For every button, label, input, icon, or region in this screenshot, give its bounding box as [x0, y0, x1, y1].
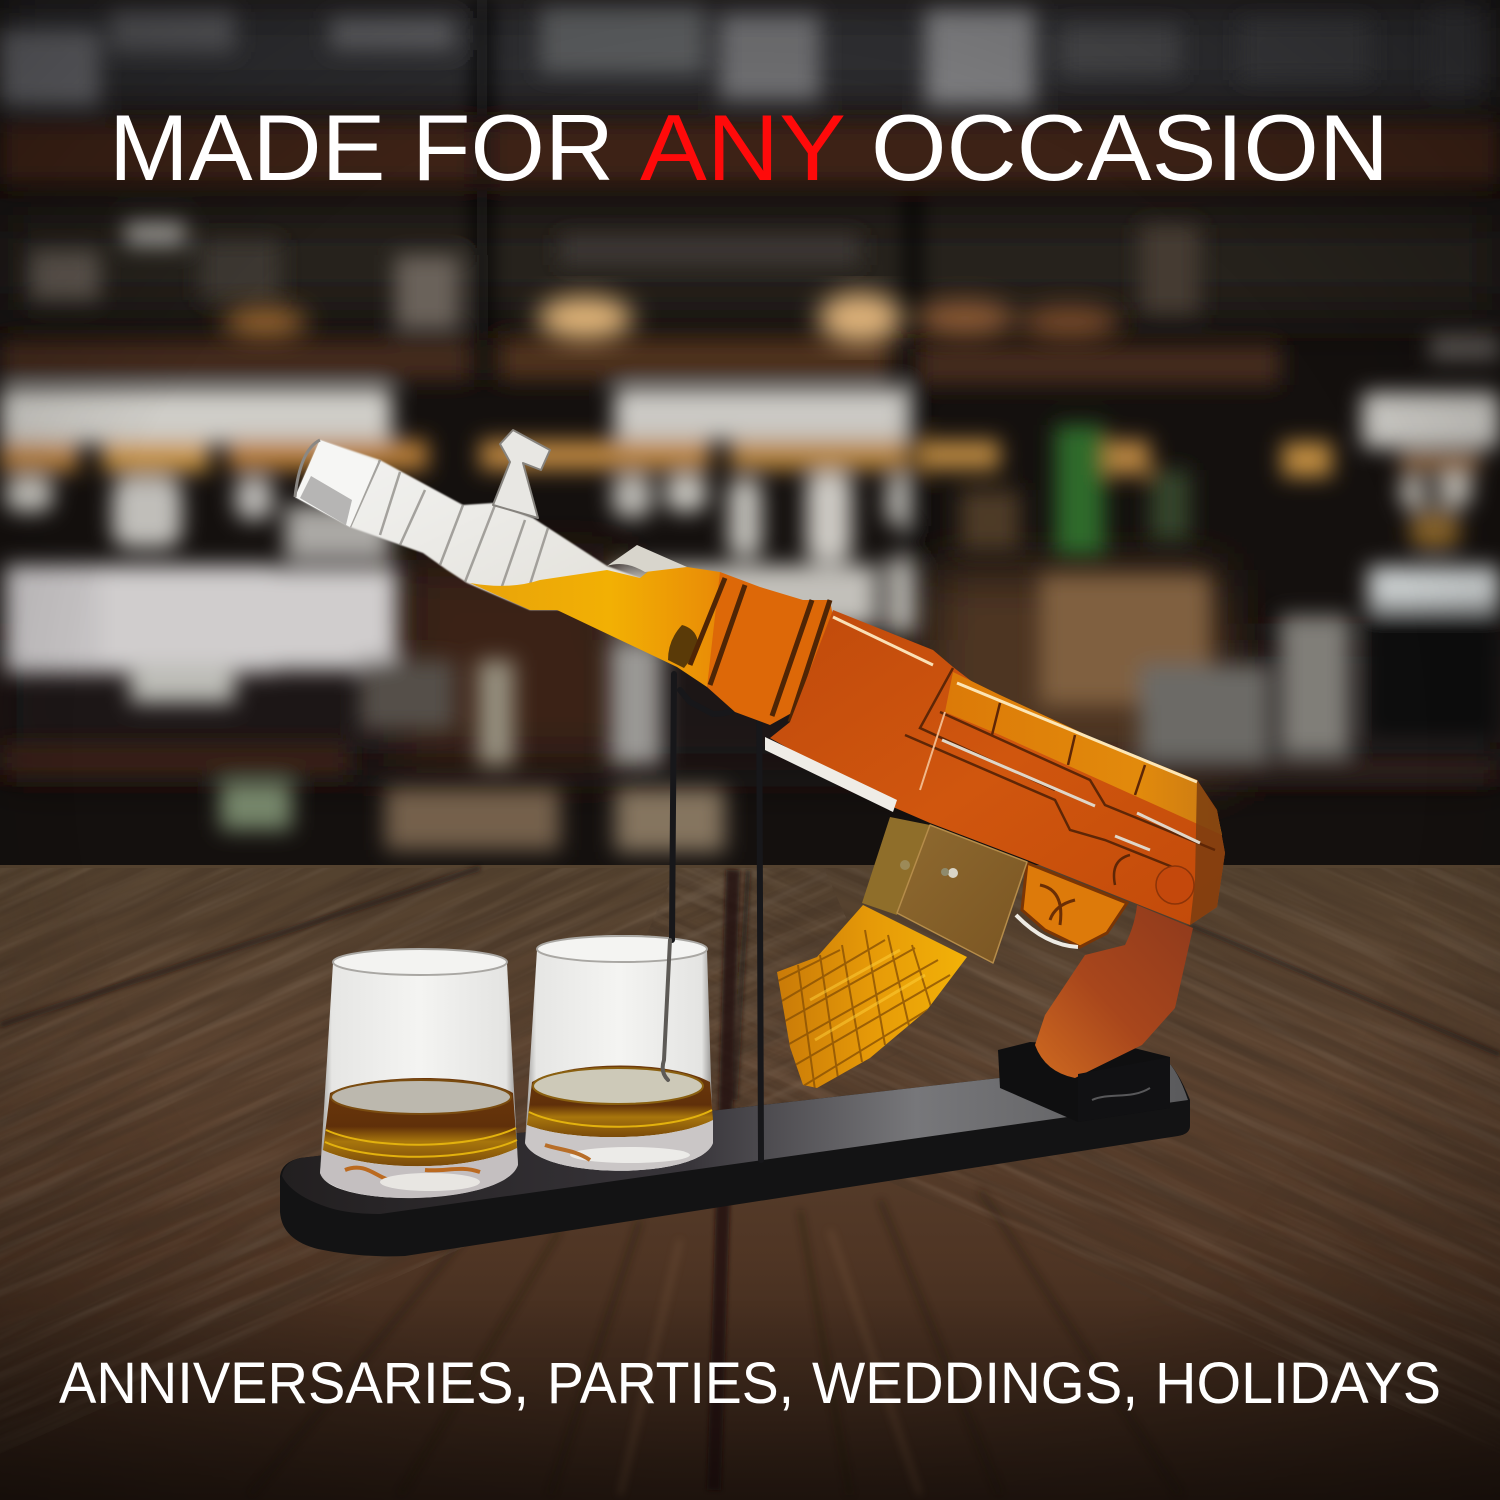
left glass rim [333, 949, 507, 975]
amber barrel [470, 567, 750, 687]
title [109, 95, 1389, 200]
right glass surface [533, 1068, 703, 1104]
right glass whisky [527, 1066, 713, 1137]
plate top surface [282, 1059, 1188, 1214]
base stand: black plate [280, 1059, 1190, 1256]
subtitle: PARTIES, [547, 1351, 794, 1416]
brass magazine housing [862, 817, 1027, 963]
left glass base [320, 1148, 518, 1198]
shadow on barrel [668, 625, 698, 668]
right glass highlights [529, 1110, 712, 1127]
receiver engraved lines [905, 668, 1215, 885]
left glass highlights [325, 1128, 517, 1157]
wooden grip [1035, 905, 1193, 1078]
magazine [770, 905, 967, 1090]
trigger guard [1016, 863, 1127, 947]
rear glass section [1190, 780, 1225, 925]
subtitle: HOLIDAYS [1155, 1351, 1441, 1416]
clear glass barrel [295, 440, 640, 610]
muzzle opening [295, 440, 378, 527]
receiver [770, 610, 1225, 925]
subtitle [59, 1351, 1441, 1416]
barrel ribs [350, 460, 548, 600]
decanter [295, 430, 1225, 1090]
holder front [1078, 1057, 1170, 1122]
dust cover [945, 672, 1222, 835]
plate front face [280, 1059, 1190, 1256]
title: OCCASION [871, 95, 1389, 200]
front sight [493, 430, 550, 518]
left glass whisky [323, 1078, 517, 1166]
title: ANY [640, 95, 846, 200]
subtitle: ANNIVERSARIES, [59, 1351, 529, 1416]
silver lines [942, 740, 1200, 850]
right glass base [525, 1120, 713, 1171]
left glass surface [331, 1080, 511, 1114]
title: MADE FOR [109, 95, 614, 200]
sight bubble on barrel [607, 545, 687, 572]
rear bulge [1156, 866, 1194, 904]
rear holder block [998, 1042, 1170, 1122]
top highlights [833, 617, 1197, 782]
subtitle: WEDDINGS, [812, 1351, 1138, 1416]
right whisky glass [525, 935, 713, 1171]
white underside strip [765, 737, 897, 812]
right glass rim [537, 936, 707, 962]
background: blurred bar shelves [0, 0, 1500, 875]
wooden table [0, 865, 1500, 1500]
handguard [707, 572, 833, 725]
wire stand [663, 629, 761, 1160]
reflected line [920, 712, 945, 790]
left whisky glass [320, 949, 518, 1198]
